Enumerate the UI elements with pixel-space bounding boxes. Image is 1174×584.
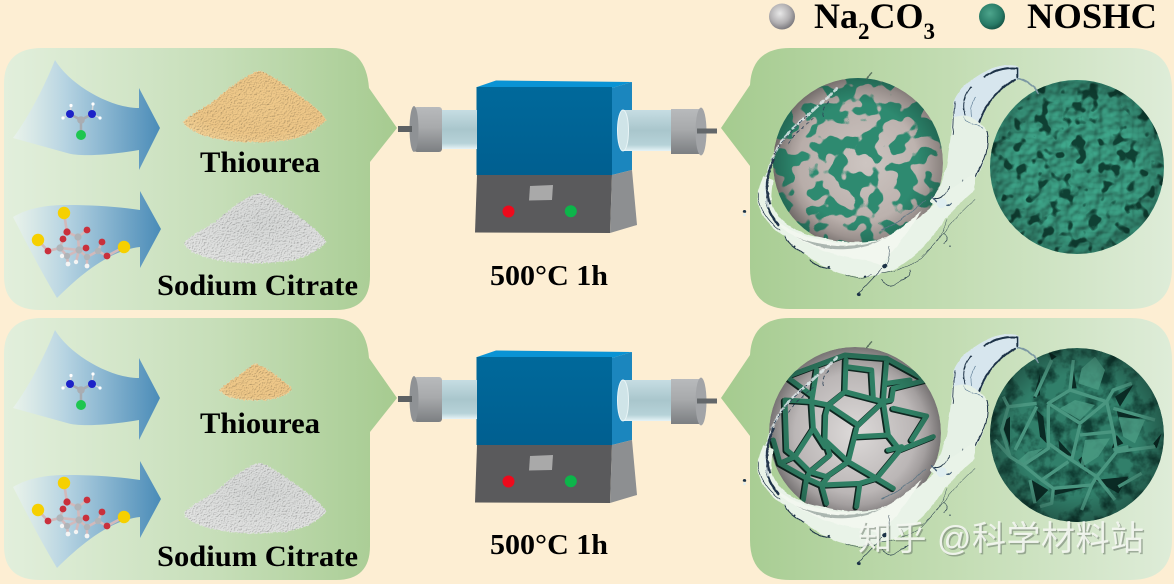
sphere: Na2CO3 with NOSHC coating <box>770 75 946 251</box>
tube furnace, row 1 <box>398 80 717 233</box>
sodium citrate powder <box>184 463 326 533</box>
legend icon: Na2CO3 sphere <box>769 4 795 30</box>
label: temperature row 1: 500°C 1h <box>490 260 608 292</box>
panel: product row 1 <box>721 48 1172 309</box>
panel: product row 2 <box>721 318 1172 580</box>
sodium citrate powder <box>184 193 326 263</box>
label: Thiourea: Thiourea <box>200 146 320 179</box>
label: Sodium Citrate: Sodium Citrate <box>157 540 358 573</box>
legend label: Na2CO3: 3 <box>924 19 935 44</box>
tube furnace, row 2 <box>398 350 717 503</box>
watermark: 知乎 @科学材料站 <box>860 522 1146 560</box>
watermark: 知乎 @科学材料站 <box>858 520 1144 558</box>
thiourea powder <box>183 71 326 142</box>
sphere: Na2CO3 with NOSHC network <box>769 347 941 519</box>
arrow with sodium citrate molecule <box>13 191 161 298</box>
arrow with sodium citrate molecule <box>13 461 161 568</box>
arrow with thiourea molecule <box>13 60 160 170</box>
water splash <box>743 65 1038 296</box>
thiourea powder, small <box>219 364 292 400</box>
label: temperature row 2: 500°C 1h <box>490 529 608 561</box>
label: Thiourea: Thiourea <box>200 407 320 440</box>
panel shape with pointer <box>721 48 1172 309</box>
sphere: NOSHC hollow network <box>988 346 1166 524</box>
panel shape with pointer <box>4 48 397 310</box>
legend label: Na2CO3: 2 <box>858 19 870 44</box>
panel shape with pointer <box>4 318 397 580</box>
legend <box>769 0 1157 44</box>
water splash <box>743 334 1038 565</box>
panel: precursors row 1 <box>4 48 397 310</box>
panel shape with pointer <box>721 318 1172 580</box>
legend icon: NOSHC sphere <box>979 4 1005 30</box>
arrow with thiourea molecule <box>13 330 160 440</box>
label: Sodium Citrate: Sodium Citrate <box>157 269 358 302</box>
sphere: porous NOSHC <box>988 78 1166 256</box>
panel: precursors row 2 <box>4 318 397 580</box>
